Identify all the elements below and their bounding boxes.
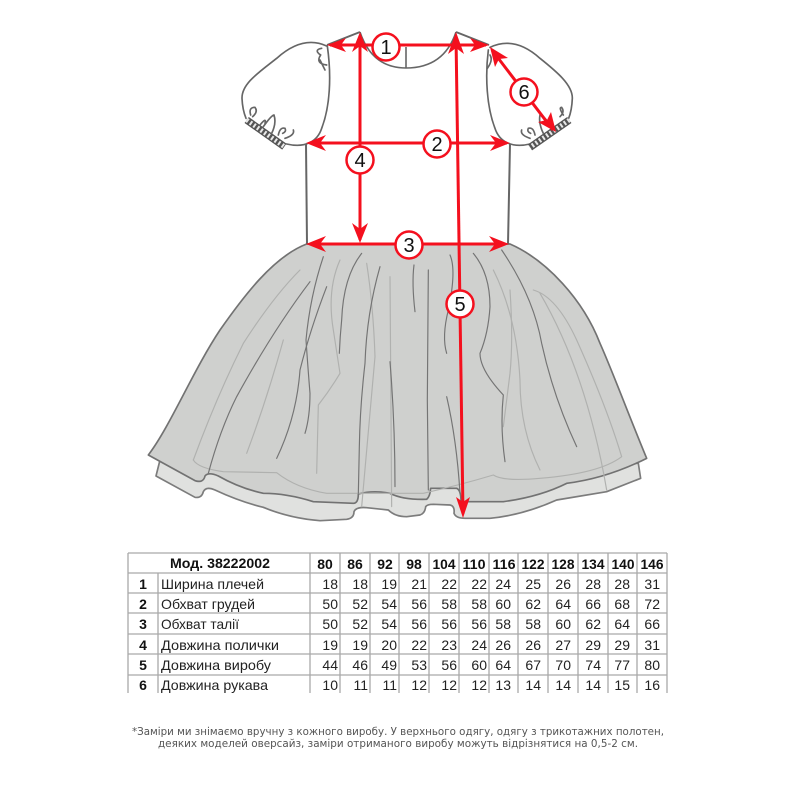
table header: 116 (492, 556, 516, 572)
measurement 4: front length arrow (346, 32, 374, 243)
neckline (360, 32, 456, 68)
footnote (132, 725, 664, 750)
row 5: total length: 44 (322, 657, 338, 673)
table header: 80 (317, 556, 333, 572)
shoulders (327, 32, 489, 45)
row 1: shoulder width: 24 (495, 576, 511, 592)
table header: 104 (432, 556, 456, 572)
size table (128, 553, 667, 693)
row 6: sleeve length: 14 (585, 677, 601, 693)
measurement 1: shoulder width arrow: 1 (380, 37, 392, 59)
row 3: waist (139, 616, 660, 632)
row 6: sleeve length: 14 (555, 677, 571, 693)
row 6: sleeve length: 16 (644, 677, 660, 693)
row 2: chest: 66 (585, 596, 601, 612)
row 5: total length (139, 657, 660, 673)
row 1: shoulder width: 19 (381, 576, 397, 592)
row 3: waist: 56 (411, 616, 427, 632)
measurement 5: total length arrow: 5 (454, 294, 466, 316)
row 2: chest: 2 (139, 596, 147, 612)
measurement 1: shoulder width arrow (327, 34, 489, 60)
row 1: shoulder width: 21 (411, 576, 427, 592)
row 5: total length: 64 (495, 657, 511, 673)
row 3: waist: 58 (525, 616, 541, 632)
left sleeve (242, 42, 330, 147)
table header (170, 555, 664, 572)
row 4: front length: 19 (322, 637, 338, 653)
row 5: total length: 67 (525, 657, 541, 673)
table header: 140 (612, 556, 635, 572)
row 2: chest: 68 (614, 596, 630, 612)
table header: 110 (462, 556, 486, 572)
row 3: waist: 54 (381, 616, 397, 632)
table header: 146 (640, 556, 664, 572)
row 2: chest: Обхват грудей (161, 596, 255, 612)
row 1: shoulder width: Ширина плечей (161, 576, 264, 592)
row 6: sleeve length (139, 677, 660, 693)
row 1: shoulder width: 22 (441, 576, 457, 592)
row 5: total length: 46 (352, 657, 368, 673)
row 2: chest: 72 (644, 596, 660, 612)
row 5: total length: 53 (411, 657, 427, 673)
row 6: sleeve length: 12 (471, 677, 487, 693)
row 5: total length: 70 (555, 657, 571, 673)
row 2: chest: 50 (322, 596, 338, 612)
row 5: total length: 49 (381, 657, 397, 673)
row 5: total length: Довжина виробу (161, 657, 271, 673)
row 5: total length: 56 (441, 657, 457, 673)
row 6: sleeve length: 14 (525, 677, 541, 693)
sheer skirt folds (193, 260, 622, 507)
row 5: total length: 77 (614, 657, 630, 673)
row 6: sleeve length: Довжина рукава (161, 677, 268, 693)
row 5: total length: 60 (471, 657, 487, 673)
row 4: front length: 31 (644, 637, 660, 653)
row 2: chest (139, 596, 660, 612)
row 2: chest: 52 (352, 596, 368, 612)
table header: 86 (347, 556, 363, 572)
right sleeve (487, 43, 572, 147)
row 3: waist: 58 (495, 616, 511, 632)
row 1: shoulder width: 31 (644, 576, 660, 592)
table header: 122 (522, 556, 545, 572)
row 4: front length: 23 (441, 637, 457, 653)
row 4: front length: 27 (555, 637, 571, 653)
row 4: front length: Довжина полички (161, 637, 279, 653)
row 4: front length: 29 (614, 637, 630, 653)
row 2: chest: 56 (411, 596, 427, 612)
measurement 5: total length arrow (446, 32, 474, 518)
row 2: chest: 58 (471, 596, 487, 612)
row 3: waist: 60 (555, 616, 571, 632)
table header: Мод. 38222002 (170, 555, 270, 571)
row 4: front length (139, 637, 660, 653)
table grid (128, 553, 667, 693)
row 4: front length: 26 (495, 637, 511, 653)
row 2: chest: 64 (555, 596, 571, 612)
row 3: waist: 50 (322, 616, 338, 632)
row 1: shoulder width: 18 (352, 576, 368, 592)
table header: 98 (406, 556, 422, 572)
row 6: sleeve length: 13 (495, 677, 511, 693)
measurement 2: chest arrow (306, 130, 510, 158)
bodice (306, 32, 510, 244)
measurement 4: front length arrow: 4 (354, 150, 366, 172)
measurement 6: sleeve length arrow (490, 47, 556, 132)
row 3: waist: 66 (644, 616, 660, 632)
row 6: sleeve length: 11 (353, 677, 368, 693)
row 1: shoulder width: 1 (139, 576, 147, 592)
row 5: total length: 80 (644, 657, 660, 673)
row 4: front length: 4 (139, 637, 147, 653)
row 2: chest: 54 (381, 596, 397, 612)
row 6: sleeve length: 12 (441, 677, 457, 693)
row 3: waist: 3 (139, 616, 147, 632)
row 3: waist: 56 (471, 616, 487, 632)
row 2: chest: 58 (441, 596, 457, 612)
row 1: shoulder width: 22 (471, 576, 487, 592)
table header: 92 (377, 556, 393, 572)
row 3: waist: Обхват талії (161, 616, 239, 632)
under skirt layer (156, 460, 641, 521)
table header: 134 (582, 556, 605, 572)
row 1: shoulder width (139, 576, 660, 592)
skirt folds (208, 250, 577, 493)
measurement 6: sleeve length arrow: 6 (518, 82, 530, 104)
illustration: dress flat sketch (148, 32, 647, 521)
row 3: waist: 64 (614, 616, 630, 632)
row 3: waist: 62 (585, 616, 601, 632)
row 1: shoulder width: 25 (525, 576, 541, 592)
row 1: shoulder width: 28 (585, 576, 601, 592)
row 4: front length: 26 (525, 637, 541, 653)
row 1: shoulder width: 18 (322, 576, 338, 592)
row 3: waist: 52 (352, 616, 368, 632)
table header: 128 (552, 556, 575, 572)
row 2: chest: 62 (525, 596, 541, 612)
row 6: sleeve length: 12 (411, 677, 427, 693)
row 4: front length: 22 (411, 637, 427, 653)
row 5: total length: 74 (585, 657, 601, 673)
row 6: sleeve length: 6 (139, 677, 147, 693)
row 3: waist: 56 (441, 616, 457, 632)
row 6: sleeve length: 15 (614, 677, 630, 693)
row 6: sleeve length: 11 (382, 677, 397, 693)
footnote: деяких моделей оверсайз, заміри отриманого виробу можуть відрізнятися на 0,5-2 см. (158, 737, 638, 750)
row 6: sleeve length: 10 (322, 677, 338, 693)
footnote: *Заміри ми знімаємо вручну з кожного виробу. У верхнього одягу, одягу з трикотажних полотен, (132, 725, 664, 738)
row 1: shoulder width: 26 (555, 576, 571, 592)
row 5: total length: 5 (139, 657, 147, 673)
row 1: shoulder width: 28 (614, 576, 630, 592)
over skirt layer (148, 244, 647, 507)
measurement 3: waist arrow (306, 232, 509, 258)
row 4: front length: 24 (471, 637, 487, 653)
measurement 3: waist arrow: 3 (403, 235, 415, 257)
row 2: chest: 60 (495, 596, 511, 612)
row 4: front length: 20 (381, 637, 397, 653)
row 4: front length: 29 (585, 637, 601, 653)
row 4: front length: 19 (352, 637, 368, 653)
measurement 2: chest arrow: 2 (431, 134, 443, 156)
